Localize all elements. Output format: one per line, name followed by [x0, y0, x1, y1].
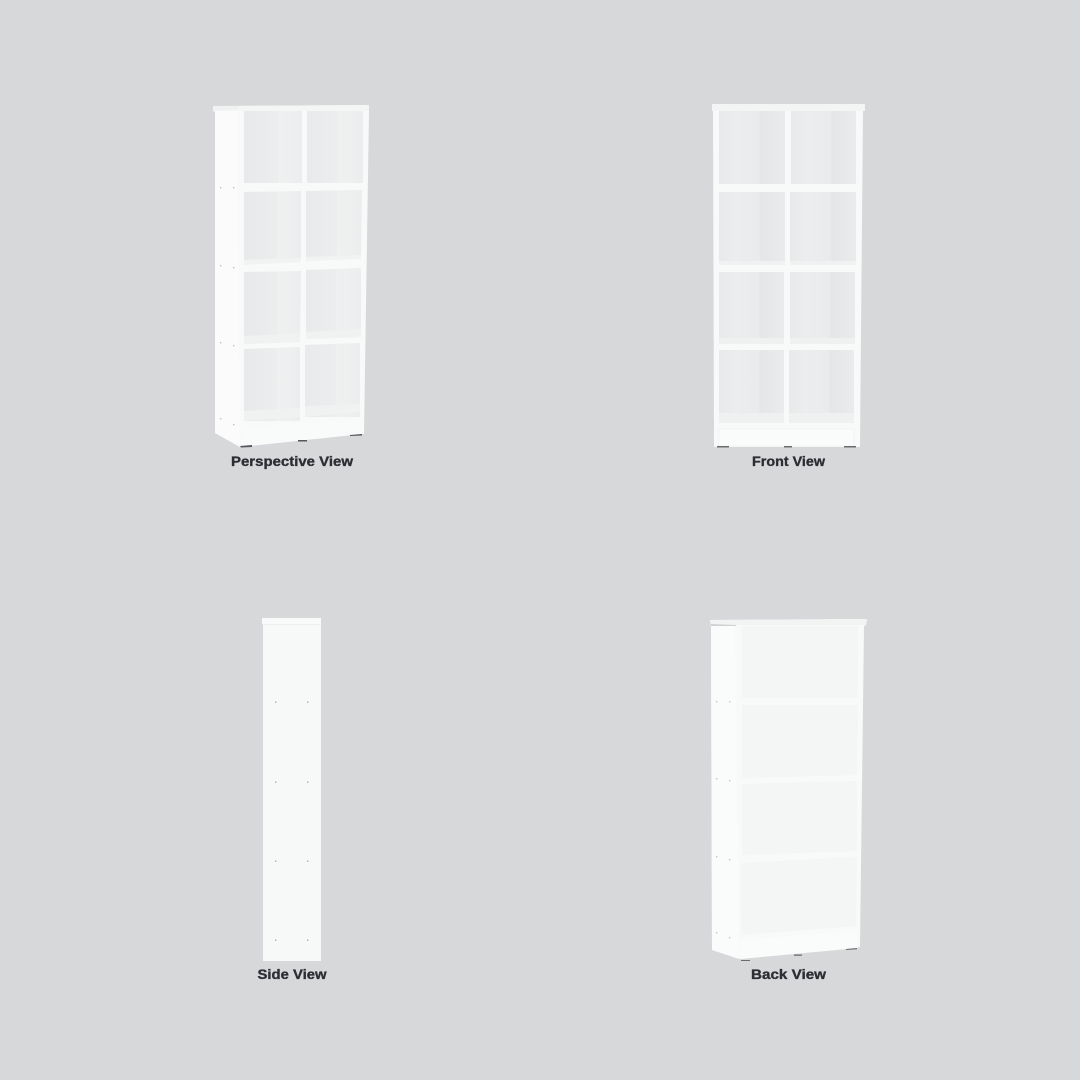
plinth	[240, 418, 361, 447]
feet	[240, 434, 362, 448]
shelf cells	[719, 111, 856, 423]
shelf cells	[244, 111, 363, 421]
panel: side view	[258, 618, 327, 982]
side panel dots	[220, 187, 234, 425]
label: back view: Back View	[751, 966, 826, 982]
plinth	[740, 931, 858, 959]
plinth	[719, 429, 854, 446]
label: front view: Front View	[752, 453, 825, 469]
feet	[741, 948, 857, 961]
label: perspective view: Perspective View	[231, 453, 353, 469]
bookshelf: perspective	[213, 105, 369, 448]
feet	[717, 446, 856, 448]
back panels	[741, 626, 858, 935]
panel: back view	[710, 619, 867, 982]
panel: perspective view	[213, 105, 369, 469]
bookshelf: side	[262, 618, 321, 961]
side panel dots	[716, 701, 730, 938]
label: side view: Side View	[258, 966, 327, 982]
side panel dots	[275, 702, 308, 941]
panel: front view	[712, 104, 865, 469]
bookshelf: front	[712, 104, 865, 448]
bookshelf: back	[710, 619, 867, 961]
